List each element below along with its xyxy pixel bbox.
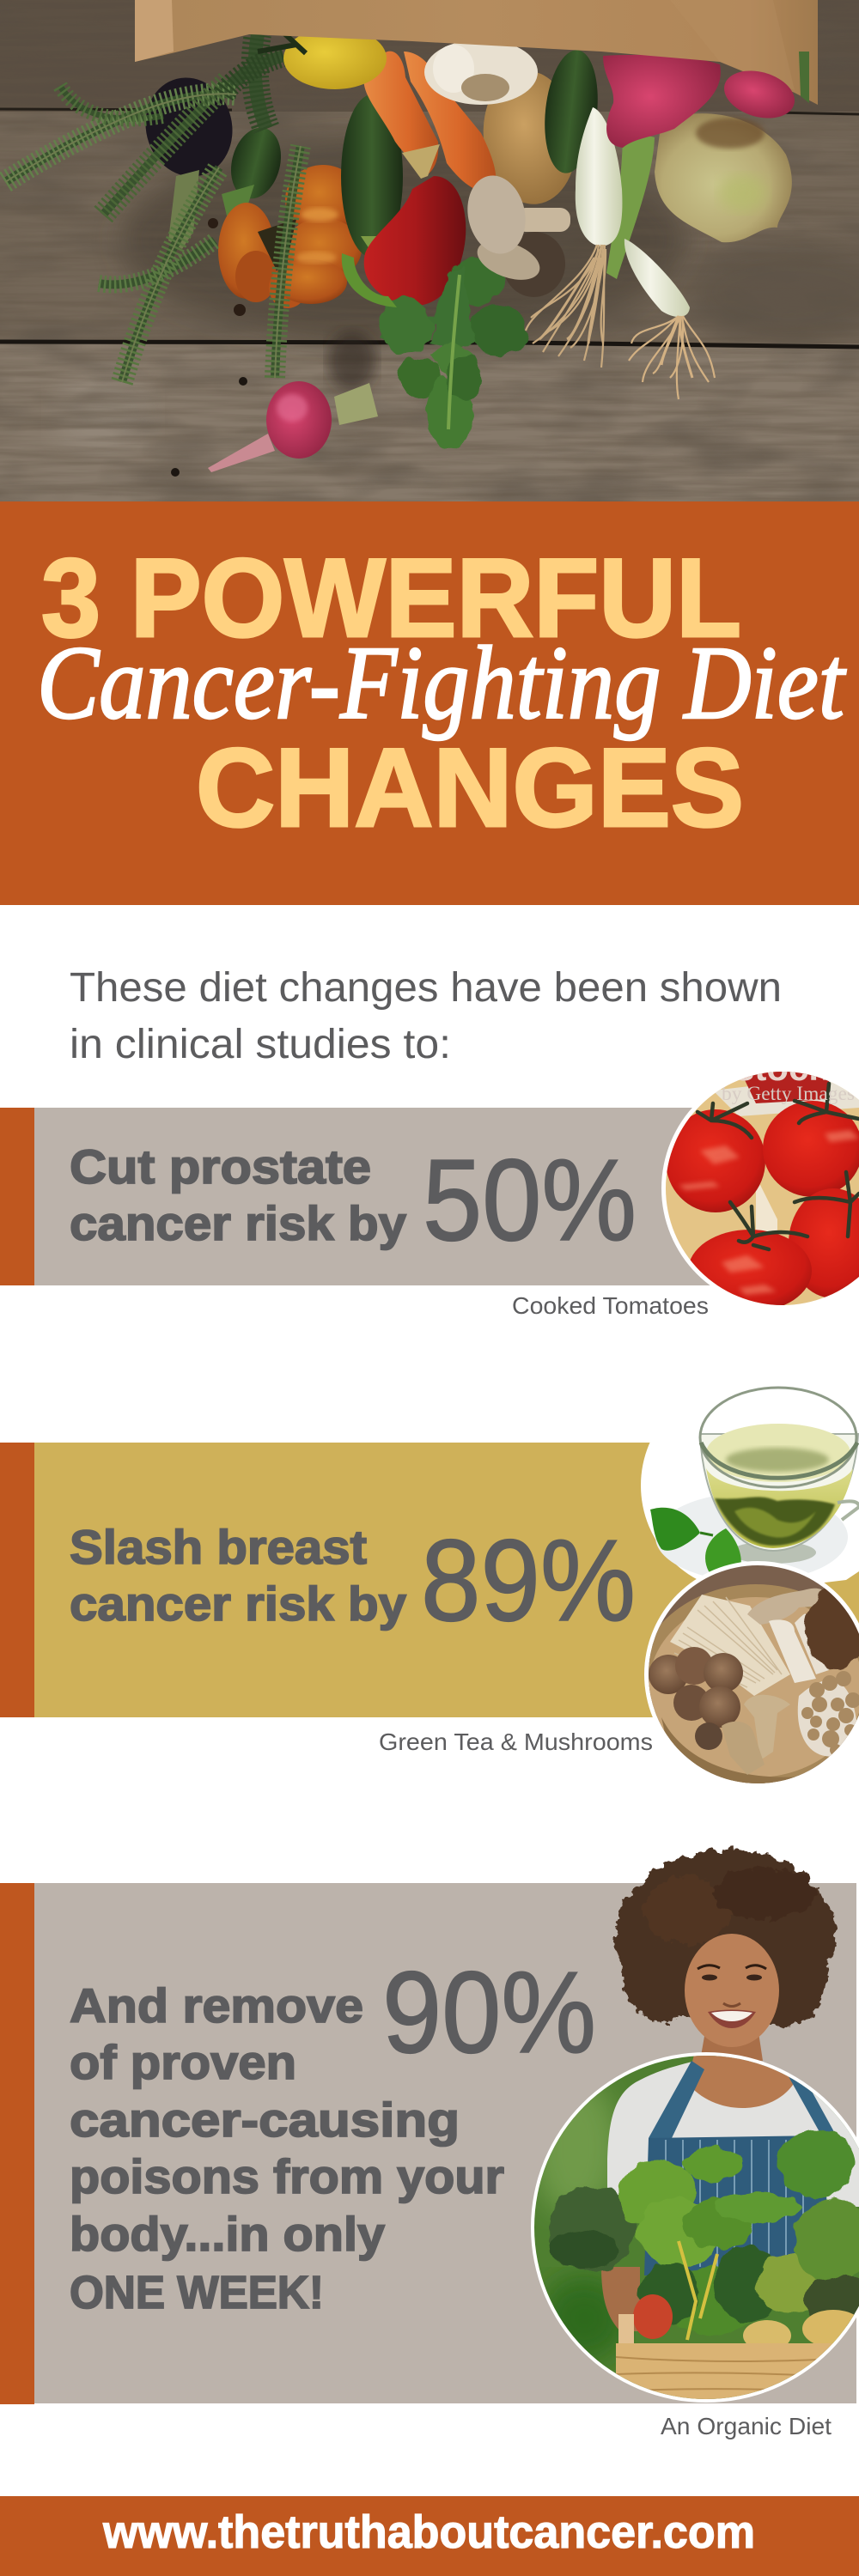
statement text line 2: cancer risk by [70, 1196, 406, 1250]
cucumber [545, 50, 598, 173]
panel background [0, 1443, 859, 1717]
carrots [364, 52, 496, 191]
accent bar [0, 1108, 34, 1285]
panel: prostate risk [0, 1072, 859, 1314]
statement text: Slash breast [70, 1520, 367, 1574]
statement text: body...in only [70, 2207, 385, 2261]
parsley [380, 258, 527, 450]
small radish [724, 70, 795, 118]
spring onion green stem [606, 129, 655, 279]
rosemary [5, 34, 301, 382]
paper bag [135, 0, 818, 105]
title line: 3 POWERFUL: 3 POWERFUL [41, 535, 741, 660]
circle interior [524, 2048, 859, 2412]
intro text: in clinical studies to: [70, 1022, 451, 1067]
stat: 50%: 50% [423, 1135, 637, 1265]
title banner [0, 501, 859, 905]
statement text: cancer-causing [70, 2093, 460, 2147]
statement text [70, 1978, 504, 2318]
celeriac [655, 113, 792, 242]
panel background [0, 1108, 859, 1285]
neck [700, 2026, 763, 2061]
hero photo: vegetables spilling from paper bag on wood [0, 0, 859, 501]
zucchini left [168, 128, 281, 249]
statement text: Cut prostate [70, 1139, 371, 1194]
bag creases [135, 0, 809, 103]
accent bar [0, 1883, 34, 2404]
title line: CHANGES: CHANGES [196, 725, 744, 850]
mushrooms [467, 175, 570, 297]
face [685, 1934, 779, 2047]
caption: Green Tea & Mushrooms [379, 1728, 653, 1755]
intro text: These diet changes have been shown [70, 965, 782, 1011]
statement text line 2: cancer risk by [70, 1577, 406, 1631]
zucchini centre [341, 94, 403, 258]
statement text: of proven [70, 2035, 296, 2089]
intro text [70, 965, 782, 1067]
statement text: ONE WEEK! [70, 2267, 324, 2318]
root fibres two [629, 316, 715, 399]
red pepper [364, 176, 466, 306]
accent bar [0, 1443, 34, 1717]
statement text: And remove [70, 1978, 363, 2032]
footer banner [0, 2496, 859, 2576]
photo: cooked tomatoes [661, 1072, 859, 1305]
caption: An Organic Diet [661, 2413, 832, 2439]
spring onion two [624, 239, 690, 317]
loose radish on table [208, 381, 378, 472]
photo: cooked tomatoes: stock [734, 1048, 829, 1088]
photo: woman with organic vegetables [524, 1850, 859, 2412]
panel background [0, 1883, 856, 2403]
garlic [424, 39, 538, 105]
celeriac brown patches [696, 118, 767, 212]
heirloom tomato [218, 165, 362, 308]
photo: mushrooms [636, 1563, 859, 1795]
stat: 89%: 89% [421, 1516, 636, 1645]
hair [616, 1850, 836, 2026]
panel: breast risk [0, 1379, 859, 1795]
photo: green tea [641, 1379, 859, 1592]
potato [483, 72, 572, 204]
wooden planks [0, 0, 859, 501]
lemon [283, 36, 387, 89]
website url: www.thetruthaboutcancer.com [102, 2506, 755, 2558]
parsley stem [448, 275, 460, 429]
white ring for mushrooms [644, 1561, 859, 1788]
eggplant [146, 77, 232, 176]
rosemary over lemon [258, 33, 306, 53]
stat: 90%: 90% [382, 1947, 596, 2077]
statement text: poisons from your [70, 2149, 504, 2203]
green pepper strip [342, 253, 397, 307]
spring onion one [576, 107, 622, 246]
big radish [603, 55, 721, 148]
root fibres one [526, 245, 606, 368]
white circle ring [531, 2052, 859, 2403]
photo: cooked tomatoes: by Getty Images [722, 1083, 855, 1104]
caption: Cooked Tomatoes [512, 1292, 709, 1319]
panel: toxin removal [0, 1850, 859, 2439]
white cover right of circle [783, 1065, 859, 1314]
